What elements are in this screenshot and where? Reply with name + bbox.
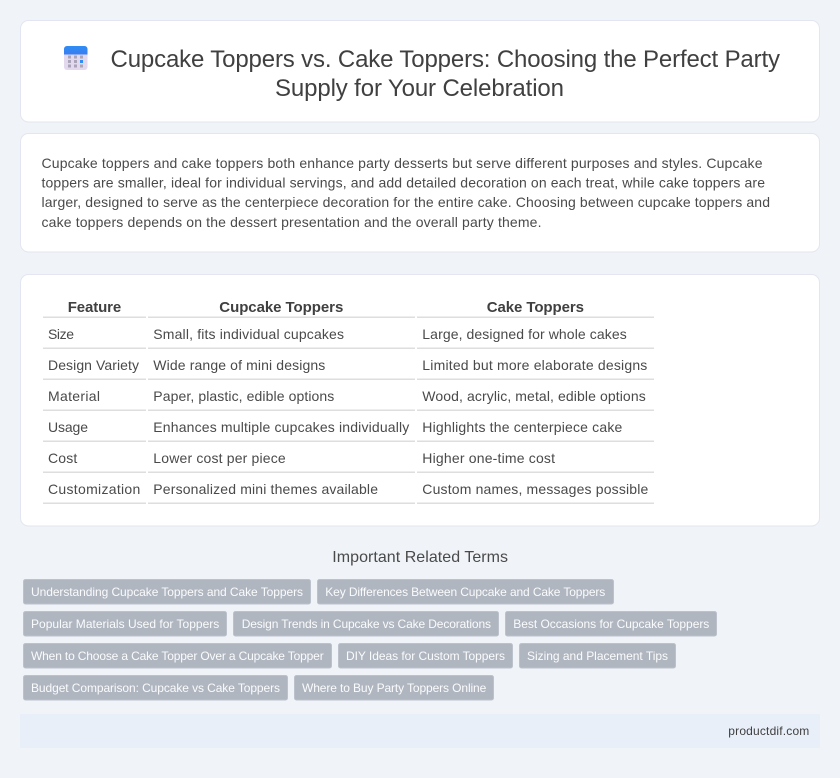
tag: [318, 580, 614, 604]
tag: DIY Ideas for Custom Toppers: [346, 649, 505, 663]
footer: [20, 714, 820, 748]
row: material: [48, 388, 646, 404]
tag: [24, 676, 288, 700]
intro paragraph: toppers are smaller, ideal for individual servings, and add detailed decoration on each treat, while cake toppers are: [42, 175, 765, 191]
row: cost: Higher one-time cost: [422, 450, 555, 466]
row: material: Wood, acrylic, metal, edible options: [422, 388, 646, 404]
table header row: [68, 299, 584, 316]
row: usage: Enhances multiple cupcakes individually: [153, 419, 409, 435]
heading: important related terms: Important Related Terms: [332, 549, 508, 566]
row: usage: [48, 419, 623, 435]
row: design variety: Limited but more elaborate designs: [422, 357, 647, 373]
row: material: Paper, plastic, edible options: [153, 388, 334, 404]
table header row: Feature: [68, 299, 121, 316]
tag: [24, 644, 332, 668]
tag: [24, 580, 310, 604]
row: customization: [48, 481, 649, 497]
row: size: Size: [48, 326, 74, 342]
tag: Understanding Cupcake Toppers and Cake Toppers: [31, 585, 303, 599]
panel: comparison table: [20, 274, 820, 526]
tag: Where to Buy Party Toppers Online: [302, 681, 487, 695]
tag: Best Occasions for Cupcake Toppers: [513, 617, 709, 631]
row: usage: Highlights the centerpiece cake: [422, 419, 623, 435]
title: Supply for Your Celebration: [275, 75, 564, 102]
intro paragraph: cake toppers depends on the dessert presentation and the overall party theme.: [42, 214, 542, 230]
tag: Key Differences Between Cupcake and Cake Toppers: [325, 585, 605, 599]
row: cost: Lower cost per piece: [153, 450, 286, 466]
icon: calendar: [64, 46, 88, 70]
intro paragraph: Cupcake toppers and cake toppers both enhance party desserts but serve different purposes and styles. Cupcake: [42, 155, 763, 171]
table header row: Cupcake Toppers: [219, 299, 343, 316]
tag: [520, 644, 676, 668]
tag: [294, 676, 494, 700]
title: Cupcake Toppers vs. Cake Toppers: Choosing the Perfect Party: [110, 46, 780, 73]
tag: Sizing and Placement Tips: [527, 649, 668, 663]
intro paragraph: larger, designed to serve as the centerpiece decoration for the entire cake. Choosing between cupcake toppers and: [42, 194, 770, 210]
row: customization: Customization: [48, 481, 140, 497]
tag: [506, 612, 716, 636]
tag: Popular Materials Used for Toppers: [31, 617, 219, 631]
footer: productdif.com: [728, 724, 809, 738]
row: customization: Custom names, messages possible: [422, 481, 649, 497]
tag: [24, 612, 226, 636]
row: usage: Usage: [48, 419, 88, 435]
row: design variety: Wide range of mini designs: [153, 357, 325, 373]
table header row: Cake Toppers: [487, 299, 584, 316]
panel: introduction text: [20, 134, 820, 252]
row: size: Small, fits individual cupcakes: [153, 326, 344, 342]
row: material: Material: [48, 388, 100, 404]
tag: Budget Comparison: Cupcake vs Cake Toppers: [31, 681, 280, 695]
related terms tags: [24, 580, 716, 700]
row: design variety: Design Variety: [48, 357, 139, 373]
row: customization: Personalized mini themes available: [153, 481, 378, 497]
tag: [338, 644, 512, 668]
tag: Design Trends in Cupcake vs Cake Decorations: [242, 617, 491, 631]
row: size: [48, 326, 627, 342]
intro paragraph: [42, 155, 770, 230]
tag: When to Choose a Cake Topper Over a Cupcake Topper: [31, 649, 324, 663]
panel: title header: [20, 20, 820, 122]
row: cost: [48, 450, 555, 466]
row: size: Large, designed for whole cakes: [422, 326, 627, 342]
tag: [234, 612, 498, 636]
row: cost: Cost: [48, 450, 77, 466]
title: [110, 46, 780, 102]
row: design variety: [48, 357, 647, 373]
